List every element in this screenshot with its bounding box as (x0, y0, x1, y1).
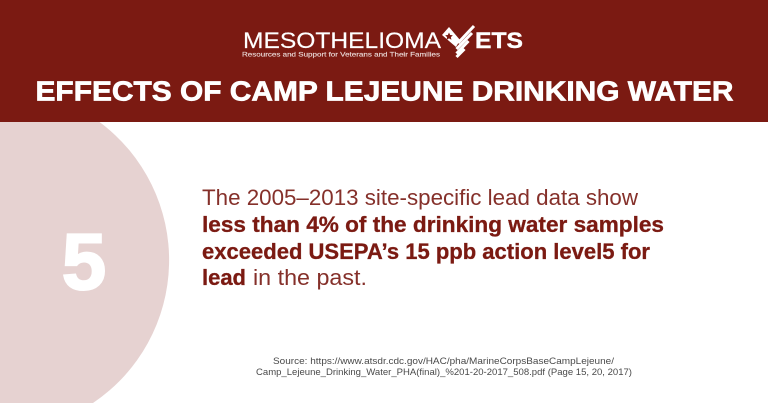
header band (0, 0, 768, 122)
line 3: exceeded USEPA’s 15 ppb action level5 for (202, 239, 650, 264)
line 4: lead (202, 265, 246, 290)
source line 2: Camp_Lejeune_Drinking_Water_PHA(final)_%201-20-2017_508.pdf (Page 15, 20, 2017) (256, 367, 632, 378)
source note (256, 356, 632, 378)
line 1: The 2005–2013 site-specific lead data show (202, 185, 638, 210)
source line 1: Source: https://www.atsdr.cdc.gov/HAC/pha/MarineCorpsBaseCampLejeune/ (273, 356, 614, 367)
line 4 (202, 265, 367, 290)
logo (242, 26, 523, 58)
line 4: in the past. (253, 265, 367, 290)
logo wordmark: MESOTHELIOMA (243, 28, 441, 53)
decorative circle panel (0, 122, 169, 403)
logo wordmark bold: ETS (475, 28, 523, 53)
logo icon: shield chevron (442, 26, 474, 57)
main text block (202, 185, 664, 290)
line 2: less than 4% of the drinking water samples (202, 212, 664, 237)
number 5: 5 (62, 217, 106, 306)
logo tagline: Resources and Support for Veterans and Their Families (242, 52, 441, 58)
title: EFFECTS OF CAMP LEJEUNE DRINKING WATER (36, 76, 734, 106)
